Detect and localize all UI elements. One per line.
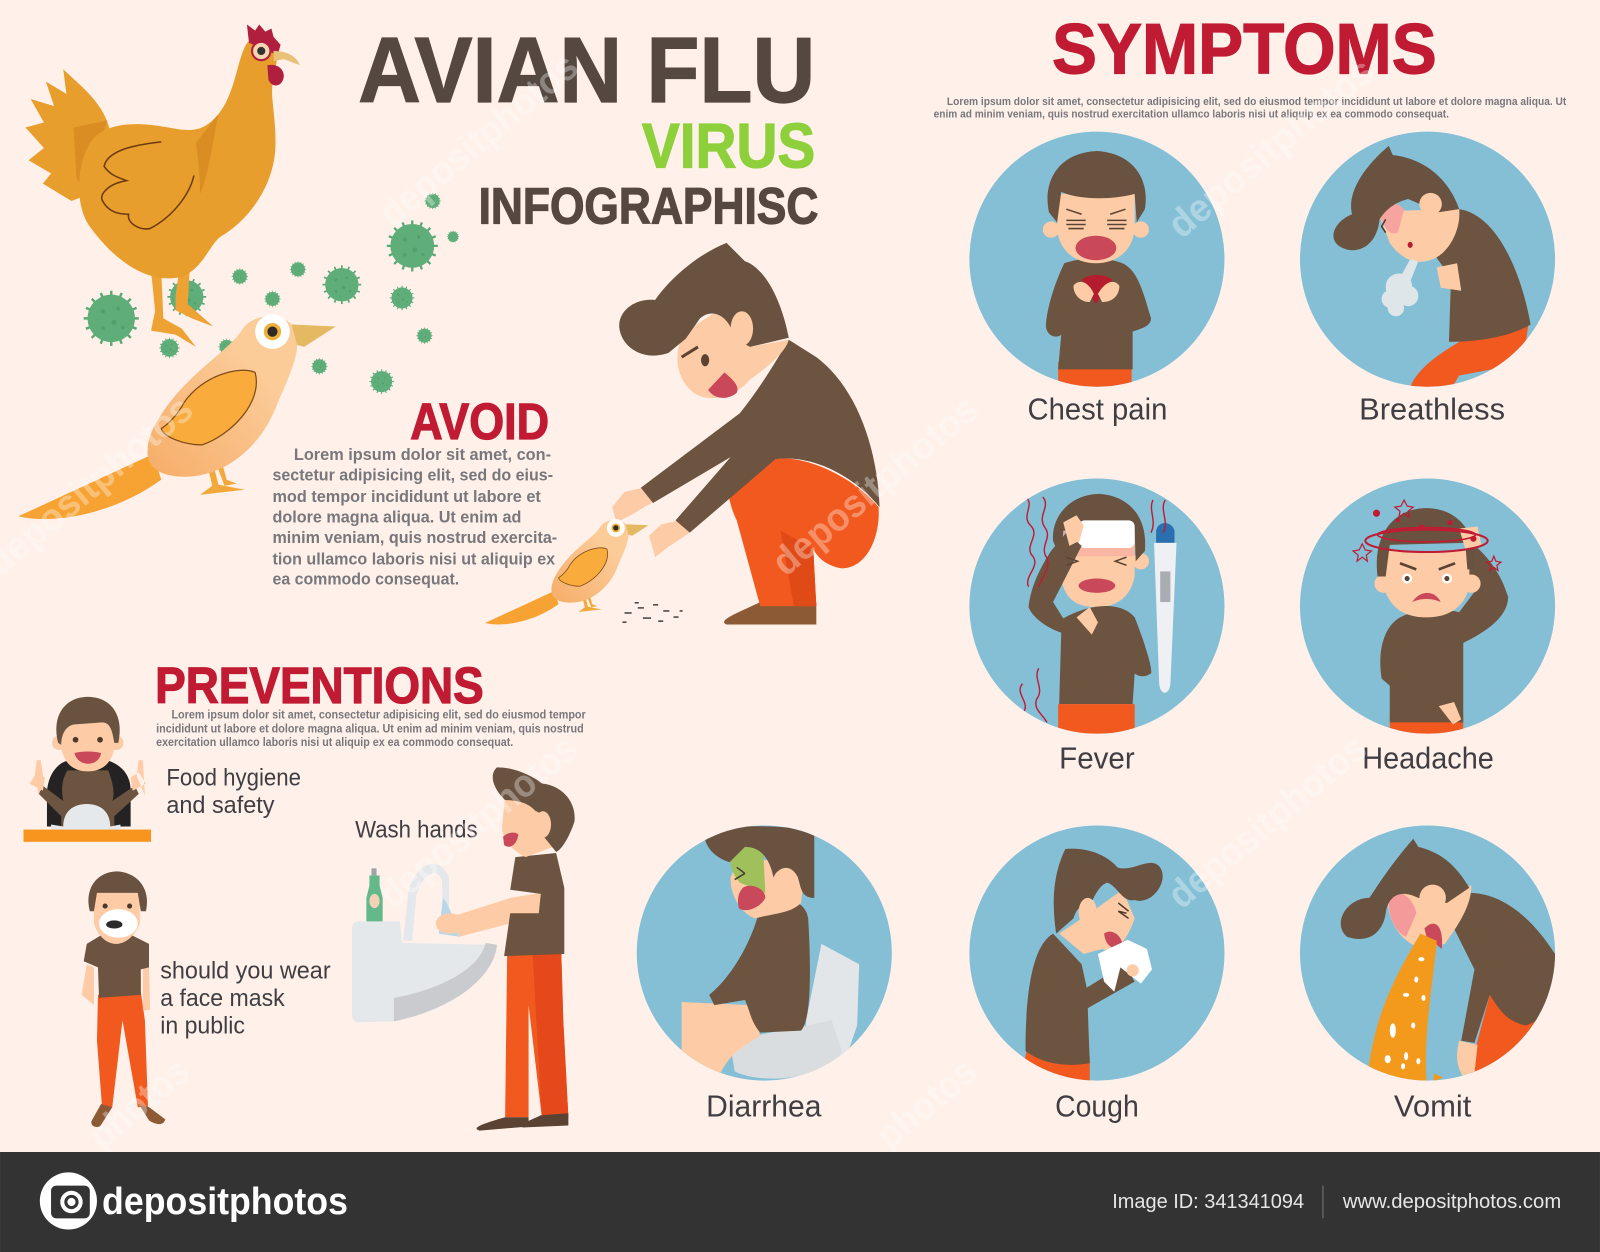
title: virus: VIRUS: [642, 111, 815, 181]
pants: [505, 951, 568, 1117]
figure: [1020, 849, 1163, 1087]
hair: [493, 767, 575, 852]
text: preventions intro: exercitation ullamco laboris nisi ut aliquip ex ea commodo consequat.: [156, 736, 513, 749]
figure: [1020, 494, 1177, 735]
hen legs: [151, 267, 213, 347]
text: avoid paragraph: dolore magna aliqua. Ut enim ad: [272, 508, 521, 526]
circle: [969, 132, 1224, 387]
text: avoid paragraph: minim veniam, quis nostrud exercita-: [272, 529, 557, 547]
watermarks: photos: [868, 1050, 985, 1158]
hands and cutlery: [30, 760, 146, 796]
man shirt: [641, 340, 880, 533]
head: [94, 893, 140, 944]
text: symptoms intro: Lorem ipsum dolor sit amet, consectetur adipisicing elit, sed do eiusmod tempor incididunt ut labore et dolore magna aliqua. Ut: [947, 96, 1567, 108]
illustration: hen: [26, 24, 300, 347]
symptom: cough: [969, 825, 1224, 1087]
footer website: www.depositphotos.com: [1342, 1191, 1561, 1213]
watermarks: depositphotos: [764, 388, 987, 584]
shirt and arms: [39, 770, 139, 829]
text: avoid paragraph: mod tempor incididunt ut labore et: [272, 488, 541, 506]
illustration: man eating: [23, 697, 151, 842]
man shoes: [724, 602, 816, 624]
head: [502, 796, 553, 857]
bird wing: [161, 370, 256, 445]
circle: [637, 825, 892, 1081]
label: face mask: a face mask: [160, 985, 285, 1012]
label: wash hands: Wash hands: [355, 817, 478, 844]
mask: [99, 909, 138, 938]
faucet: [403, 864, 449, 941]
illustration: small bird: [485, 519, 648, 624]
hen wing: [102, 142, 194, 229]
symptom: chest pain: [969, 132, 1224, 393]
illustration: man with mask: [82, 871, 165, 1127]
label: diarrhea: Diarrhea: [706, 1089, 822, 1123]
figure: [1341, 839, 1555, 1097]
water: [439, 898, 459, 937]
heading: preventions: PREVENTIONS: [155, 657, 484, 714]
illustration: man washing hands: [436, 767, 575, 1131]
text: symptoms intro: enim ad minim veniam, quis nostrud exercitation ullamco laboris nisi ut aliquip ex ea commodo consequat.: [934, 108, 1449, 120]
footer divider: [1322, 1186, 1323, 1218]
hen comb, wattle and beak: [247, 24, 284, 85]
head: [52, 697, 123, 771]
label: fever: Fever: [1059, 741, 1135, 775]
label: face mask: [160, 958, 331, 1040]
label: face mask: in public: [160, 1013, 245, 1040]
figure: [1043, 151, 1151, 393]
illustration: crouching man: [612, 243, 880, 624]
figure: [1333, 146, 1531, 393]
viruses behind hen: [159, 278, 206, 358]
eyes: [103, 904, 132, 909]
bird tail: [18, 454, 161, 519]
plate: [51, 804, 120, 830]
bird beak: [292, 324, 336, 347]
label: headache: Headache: [1362, 741, 1494, 775]
symptom: fever: [969, 479, 1224, 735]
label: face mask: should you wear: [160, 958, 331, 985]
title: avian flu: AVIAN FLU: [358, 18, 815, 122]
heading: symptoms: SYMPTOMS: [1052, 9, 1437, 89]
hen tail shade: [73, 120, 107, 194]
viruses cluster: [84, 193, 459, 394]
label: food hygiene: Food hygiene: [166, 765, 301, 792]
bird legs: [200, 464, 245, 495]
figure: [1353, 500, 1508, 740]
symptom: vomit: [1300, 825, 1555, 1097]
circle: [969, 479, 1224, 734]
man face: [677, 306, 789, 398]
bird eye: [255, 314, 290, 349]
hen tail: [26, 69, 109, 201]
label: breathless: Breathless: [1359, 392, 1505, 426]
arm: [453, 893, 543, 937]
text: preventions intro: Lorem ipsum dolor sit amet, consectetur adipisicing elit, sed do eiusmod tempor: [171, 708, 586, 721]
legs: [97, 992, 148, 1107]
symptom: diarrhea: [637, 825, 892, 1084]
shoes: [91, 1104, 165, 1127]
bottle: [366, 868, 383, 921]
label: cough: Cough: [1055, 1089, 1139, 1123]
heading: avoid: AVOID: [410, 393, 549, 450]
text: avoid paragraph: [272, 446, 557, 589]
hand: [436, 913, 464, 934]
label: food hygiene: and safety: [166, 792, 275, 819]
watermarks: depositphotos: [1160, 727, 1375, 917]
text: preventions intro: [156, 708, 586, 749]
watermarks: photos: [80, 1050, 198, 1158]
table: [23, 830, 151, 842]
footer image id: Image ID: 341341094: [1112, 1191, 1304, 1213]
basin shade: [394, 943, 497, 1021]
watermarks: [0, 45, 1383, 1158]
bird seeds: [622, 602, 683, 623]
mouth: [503, 833, 518, 847]
circle: [1300, 132, 1555, 387]
watermarks: depositphotos: [371, 727, 586, 917]
man hair: [619, 243, 789, 356]
pants shade: [533, 951, 568, 1117]
label: food hygiene: [166, 765, 301, 819]
hair: [88, 871, 147, 911]
chair: [47, 760, 131, 827]
title: infographisc: INFOGRAPHISC: [479, 177, 818, 234]
sink: [352, 921, 497, 1022]
footer logo icon: [40, 1172, 97, 1230]
label: chest pain: Chest pain: [1028, 392, 1167, 426]
circle: [1300, 825, 1555, 1081]
text: symptoms intro: [934, 96, 1567, 120]
watermarks: depositphotos: [371, 45, 586, 235]
hen neck shade: [196, 114, 218, 194]
footer logo wordmark: depositphotos: [102, 1180, 348, 1222]
man eye and brow: [682, 347, 698, 357]
hen body: [79, 37, 278, 278]
bird body: [147, 316, 297, 477]
man hands: [612, 488, 690, 557]
shirt: [84, 935, 149, 998]
man pants: [728, 454, 879, 606]
shirt: [504, 853, 564, 956]
man ear: [731, 311, 753, 346]
symptom: headache: [1300, 479, 1555, 740]
text: avoid paragraph: ea commodo consequat.: [272, 571, 459, 589]
illustration: large bird: [18, 314, 336, 519]
figure: [682, 826, 859, 1084]
illustration: sink and bottle: [352, 864, 497, 1022]
ear: [535, 811, 551, 838]
circle: [1300, 479, 1555, 734]
symptom: breathless: [1300, 132, 1555, 393]
text: avoid paragraph: sectetur adipisicing elit, sed do eius-: [272, 467, 553, 485]
text: preventions intro: incididunt ut labore et dolore magna aliqua. Ut enim ad minim veniam, quis nostrud: [156, 723, 584, 736]
text: avoid paragraph: Lorem ipsum dolor sit amet, con-: [294, 446, 551, 464]
man inner leg shade: [781, 531, 816, 606]
text: avoid paragraph: tion ullamco laboris nisi ut aliquip ex: [272, 550, 555, 568]
label: vomit: Vomit: [1394, 1089, 1472, 1123]
circle: [969, 825, 1224, 1081]
man mouth: [708, 372, 737, 398]
watermarks: depositphotos: [1160, 50, 1383, 247]
footer bar: [0, 1152, 1600, 1252]
arms: [82, 964, 150, 1010]
shoes: [477, 1113, 568, 1131]
